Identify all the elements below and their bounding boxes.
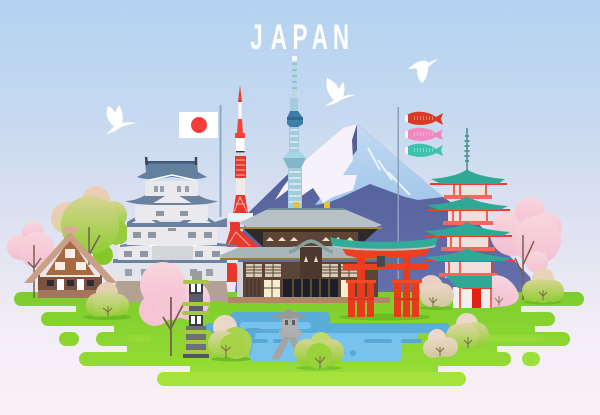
teal cap [330,237,438,249]
minka thatched house [24,227,117,298]
lower roof [113,259,227,263]
left white post [237,262,243,297]
upper floor [135,205,208,220]
snow cap shaded side [315,124,443,205]
bush: left [83,282,131,320]
spire [466,128,468,170]
top floor [145,181,198,196]
snow cap lit side [275,124,357,210]
green pill right [522,352,540,366]
red door [472,289,481,308]
top roof [137,162,207,179]
moss caps [180,280,212,354]
upper roof [125,195,218,205]
red carp [407,112,443,125]
bush: tan near pagoda [419,275,454,310]
upper wall [263,232,358,248]
bush: pond centre [294,332,344,370]
crossbeam [343,264,428,270]
teal carp [407,144,443,157]
left pillars [348,257,374,317]
mount fuji [235,124,535,293]
wall tier 4 [439,261,497,278]
gold ornaments [293,202,330,208]
platform [228,297,390,303]
torii gate [330,237,438,320]
lower wall [243,262,378,297]
pond [205,312,450,362]
stone base [110,280,229,302]
bottom light grass strip [157,372,466,386]
pagoda [424,128,516,308]
ground [14,292,584,373]
window lattices [246,264,357,277]
upper red beam [342,248,430,258]
third floor [118,244,227,260]
icon: crane left [106,105,137,134]
stone pagoda [180,271,212,358]
bush: pink behind pagoda [492,275,519,307]
tokyo skytree [283,56,306,210]
flag pole [220,105,222,217]
icon: crane centre [325,78,356,106]
tree: right pink cherry [490,197,562,300]
cream door panels [264,280,350,297]
dark central doors [283,279,338,297]
wall tier 3 [441,236,495,251]
ground floor [110,262,227,281]
ground storey [453,287,493,308]
roof red trims [424,184,516,288]
arched roof [120,232,237,247]
koi streamer pole [398,107,399,279]
himeji castle [110,157,237,302]
eave underside [244,229,378,247]
teal roofs [431,169,505,184]
green pill left [59,332,79,346]
wall tier 1 [444,184,492,199]
title: JAPAN [250,18,349,57]
stone lantern [270,309,308,360]
bush: pond right green [446,313,489,349]
upper tier [189,282,203,294]
grass patches [127,335,545,342]
icon: crane right [408,59,439,83]
bush: pond right tan [423,329,458,358]
japanese flag [179,112,218,138]
left slats [247,279,259,297]
bush: pond left [208,315,252,362]
wall tier 2 [443,210,493,225]
upper roof [239,208,382,229]
right pillars [394,257,419,317]
tokyo tower [225,85,260,282]
mid tier [189,314,203,326]
tablet [377,256,385,267]
twin gable roof [127,212,227,227]
pink carp [407,128,443,141]
bush: right green [522,268,564,304]
second floor [127,227,217,245]
tree: left pink cherry [7,221,55,298]
koi streamers [406,112,443,157]
tree: green maple [51,186,129,265]
temple: todai-ji hall [218,202,390,303]
tree: centre pink cherry [139,262,210,356]
central gable [300,247,322,279]
lower roof [218,246,377,260]
